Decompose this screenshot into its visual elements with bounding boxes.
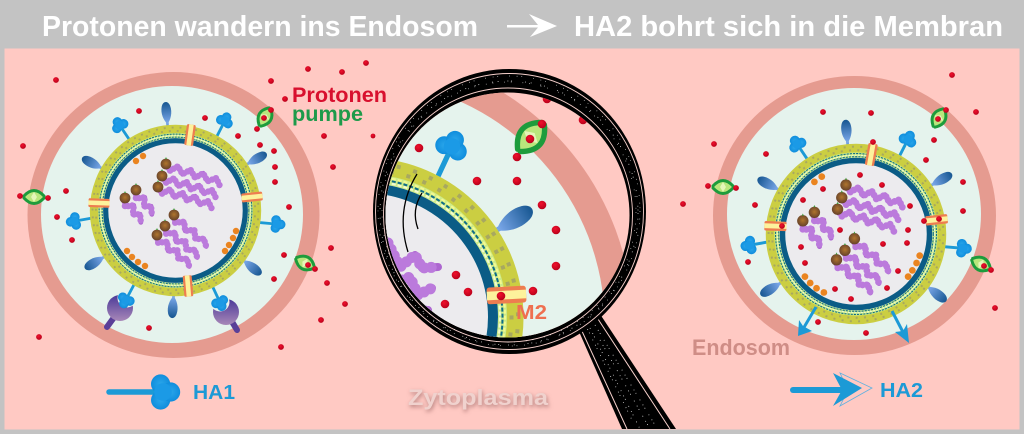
endosome wall <box>713 76 996 355</box>
virus <box>64 102 286 318</box>
protons <box>680 72 998 336</box>
legend: HA1 <box>109 374 235 410</box>
title: HA2 drills into membrane: HA2 bohrt sich in die Membran <box>574 11 1003 43</box>
virus envelope <box>92 128 258 294</box>
membrane curve lines <box>403 174 422 252</box>
HA2 spikes <box>80 102 269 318</box>
legend: HA2 <box>793 373 923 406</box>
pump enlarged <box>514 120 548 154</box>
endosome lumen <box>41 86 303 343</box>
M2 enlarged <box>486 286 527 304</box>
HA1 legend label: HA1 <box>193 382 235 404</box>
panel: left endosome <box>17 60 375 358</box>
panel: right endosome <box>680 72 998 355</box>
virus <box>739 119 973 321</box>
HA2 spikes <box>755 119 954 305</box>
endosome wall <box>28 72 320 358</box>
orange matrix dots <box>124 153 239 269</box>
HA2 legend arrow <box>793 373 872 406</box>
RNA enlarged <box>388 243 438 311</box>
magnifier rim <box>373 69 646 354</box>
arrow: HA2 inserting lower right <box>892 311 909 343</box>
lens background <box>386 92 630 338</box>
label: Endosom: Endosom <box>692 335 790 360</box>
protons <box>17 60 375 350</box>
envelope enlarged <box>380 164 518 345</box>
label: M2: M2 <box>516 302 547 324</box>
M2 channels <box>88 124 263 297</box>
arrow: header <box>507 14 557 37</box>
orange matrix dots <box>802 173 923 296</box>
protons enlarged <box>415 95 587 308</box>
magnified view <box>386 92 630 338</box>
HA2 enlarged <box>496 206 533 232</box>
HA1 legend icon <box>109 374 180 410</box>
title: protons migrate into endosome: Protonen wandern ins Endosom <box>42 11 478 43</box>
RNA segments <box>797 178 905 296</box>
HA1 spikes <box>64 109 286 314</box>
label: Zytoplasma: Zytoplasma <box>408 385 549 410</box>
RNA segments <box>120 157 222 269</box>
receptors <box>107 288 239 330</box>
HA2 legend label: HA2 <box>880 380 923 402</box>
label: pumpe: pumpe <box>292 103 363 126</box>
endosome wall enlarged <box>386 92 624 338</box>
proton pumps <box>24 105 317 273</box>
proton pumps <box>713 106 993 274</box>
arrow: HA2 inserting lower left <box>798 307 816 336</box>
magnifying glass <box>373 69 676 429</box>
M2 channels <box>764 143 948 231</box>
label: Protonen: Protonen <box>292 84 387 107</box>
virus envelope <box>769 147 943 321</box>
magnifier handle <box>577 311 676 429</box>
lumen enlarged <box>386 102 602 338</box>
endosome lumen <box>727 88 981 340</box>
HA1 enlarged <box>435 130 467 177</box>
HA1 spikes <box>739 127 973 258</box>
